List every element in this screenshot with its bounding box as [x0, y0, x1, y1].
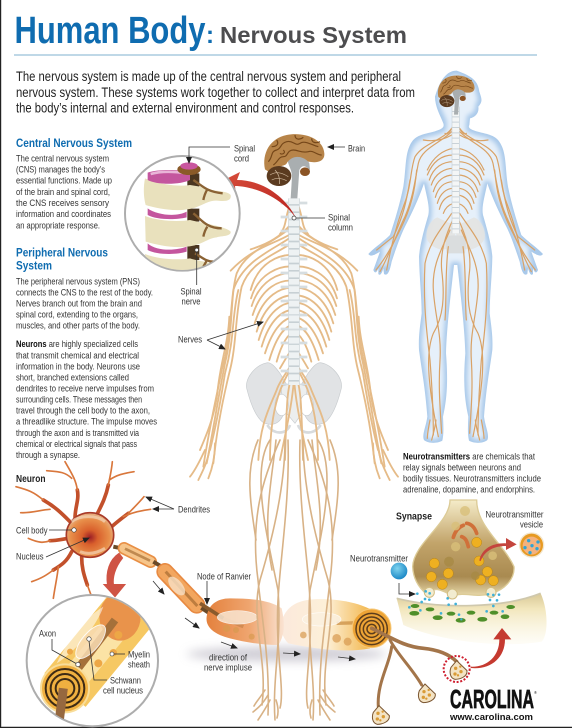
bouton two — [418, 684, 435, 703]
spinal cord top — [177, 166, 201, 175]
small nerves left side — [376, 125, 453, 440]
left trunk and arm nerves — [190, 205, 294, 480]
pelvis — [246, 363, 342, 432]
text block: neurons: that transmit chemical and electrical — [16, 350, 139, 362]
label: axon: Axon — [39, 628, 56, 638]
text block: neurons: a threadlike structure. The impulse moves — [16, 416, 157, 428]
bouton three — [372, 706, 389, 724]
label: brain: Brain — [348, 142, 365, 154]
label: myelin sheath: Myelin — [128, 648, 150, 660]
label: brain — [328, 142, 365, 154]
label: schwann cell nucleus — [87, 637, 143, 696]
label: spinal cord — [189, 142, 255, 164]
label: dendrites — [146, 497, 210, 514]
neurotransmitter ball — [391, 563, 407, 579]
label: myelin sheath — [110, 648, 150, 670]
presynaptic bulb — [413, 500, 514, 596]
small brain — [438, 76, 475, 115]
label: myelin sheath: sheath — [128, 658, 150, 670]
panel: central nervous system text — [16, 136, 132, 232]
text block: neurons: chemical or electrical signals that pass — [16, 439, 137, 450]
body inner glow — [368, 71, 543, 443]
arrows: impulse direction — [153, 581, 355, 659]
synapse illustration — [391, 500, 547, 668]
label: direction of nerve impulse — [204, 652, 252, 672]
panel: peripheral nervous system text: connects the CNS to the rest of the body. — [16, 288, 153, 298]
cell body — [66, 513, 114, 557]
panel: central nervous system text: essential functions. Made up — [16, 176, 112, 186]
label: spinal column: column — [328, 222, 353, 232]
heading: neuron: Neuron — [16, 473, 46, 485]
main nervous system figure — [190, 134, 398, 480]
red arrow to synapse — [471, 628, 511, 668]
logo: carolina: www.carolina.com — [449, 712, 533, 723]
label: spinal nerve: Spinal — [180, 286, 202, 296]
leg nerves right — [300, 440, 338, 720]
vertebrae — [144, 178, 231, 280]
text block: neurons: short, branched extensions called — [16, 372, 129, 384]
discs — [148, 170, 190, 254]
label: schwann cell nucleus: cell nucleus — [103, 684, 143, 696]
receptors — [409, 604, 515, 623]
neurotransmitters text — [403, 452, 541, 496]
label: neurotransmitter: Neurotransmitter — [350, 552, 408, 564]
intro text: nervous system. These systems work together to collect and interpret data from — [16, 85, 415, 100]
text block: neurons: through a synapse. — [16, 450, 80, 461]
neurotransmitter molecules — [408, 590, 504, 620]
title: Nervous System — [220, 22, 407, 48]
brain — [264, 134, 324, 198]
inset: myelin detail circle — [27, 554, 158, 726]
panel: central nervous system text: the CNS receives sensory — [16, 198, 109, 209]
axon segment two — [165, 572, 197, 605]
title: Human Body — [14, 10, 206, 52]
vesicles — [426, 537, 498, 589]
panel: peripheral nervous system text — [16, 246, 153, 332]
label: neurotransmitter vesicle: Neurotransmitter — [486, 508, 544, 520]
small body figure — [368, 71, 543, 443]
label: neurotransmitter — [350, 552, 415, 594]
label: nucleus — [16, 538, 89, 562]
small pelvis — [426, 217, 485, 253]
panel: central nervous system text: (CNS) manages the body’s — [16, 164, 105, 176]
label: spinal column: Spinal — [328, 212, 350, 222]
small spine — [444, 107, 468, 233]
arrow to vesicle detail — [479, 538, 517, 561]
label: spinal column — [292, 212, 353, 232]
panel: central nervous system text: The central nervous system — [16, 154, 109, 164]
axon terminal branches and boutons — [372, 628, 470, 724]
text block: neurons: dendrites to receive nerve impulses from — [16, 384, 154, 394]
panel: peripheral nervous system text: System — [16, 258, 52, 272]
text block: neurons: Neurons are highly specialized cells — [16, 339, 138, 350]
vesicle detail — [520, 533, 544, 557]
label: schwann cell nucleus: Schwann — [110, 674, 141, 686]
panel: central nervous system text: Central Nervous System — [16, 136, 132, 150]
axon large myelin segment — [187, 598, 391, 661]
intro text: the body’s internal and external environment and control responses. — [16, 100, 354, 116]
mitochondria — [453, 523, 477, 547]
panel: peripheral nervous system text: spinal cord, extending to the organs, — [16, 310, 138, 320]
label: nucleus: Nucleus — [16, 550, 44, 562]
body silhouette — [368, 71, 543, 443]
title — [14, 10, 407, 52]
neurotransmitters text: adrenaline, dopamine, and endorphins. — [403, 484, 535, 496]
bouton — [450, 661, 467, 679]
label: neurotransmitter vesicle — [486, 508, 544, 530]
text block: neurons — [16, 339, 157, 461]
text block: neurons: through the axon and is transmitted via — [16, 428, 139, 439]
spine — [277, 198, 311, 385]
title: : — [206, 22, 214, 49]
label: nerves — [178, 322, 263, 349]
text block: neurons: information in the body. Neurons use — [16, 362, 140, 372]
logo: carolina — [449, 684, 537, 723]
label: nerves: Nerves — [178, 334, 202, 344]
neurotransmitters text: relay signals between neurons and — [403, 462, 521, 474]
spinal nerves — [193, 180, 223, 267]
label: spinal cord: Spinal — [234, 142, 255, 154]
inset: vertebrae circle — [125, 156, 240, 280]
intro text: The nervous system is made up of the central nervous system and peripheral — [16, 69, 401, 84]
red arrow from neuron to inset — [105, 554, 124, 596]
label: spinal nerve: nerve — [182, 296, 200, 306]
dotted selection ring — [444, 656, 470, 682]
panel: peripheral nervous system text: The peripheral nervous system (PNS) — [16, 276, 140, 288]
text block: neurons: surrounding cells. These messages then — [16, 394, 142, 406]
panel: central nervous system text: information and coordinates — [16, 209, 111, 220]
leg nerves — [250, 440, 338, 720]
axon segment one — [113, 547, 122, 548]
small nerves right side — [458, 125, 535, 440]
logo: carolina: ® — [534, 690, 537, 695]
neuron illustration — [16, 462, 213, 615]
label: cell body: Cell body — [16, 524, 48, 536]
heading: synapse: Synapse — [396, 510, 432, 522]
label: direction of nerve impulse: nerve impluse — [204, 662, 252, 672]
panel: peripheral nervous system text: Nerves branch out from the brain and — [16, 298, 142, 310]
label: cell body — [16, 524, 76, 536]
leg nerves left — [250, 440, 288, 720]
rolled myelin end — [352, 609, 391, 648]
right trunk and arm nerves — [294, 205, 398, 480]
label: spinal nerve — [180, 248, 202, 306]
released vesicle bumps — [424, 587, 496, 599]
neurotransmitters text: bodily tissues. Neurotransmitters include — [403, 474, 541, 484]
label: axon — [39, 628, 80, 667]
panel: central nervous system text: an appropriate response. — [16, 220, 100, 232]
panel: peripheral nervous system text: muscles, and other parts of the body. — [16, 320, 140, 332]
red arrow from spinal column to inset — [218, 172, 296, 218]
label: spinal cord: cord — [234, 152, 249, 164]
spinal canal — [187, 173, 199, 260]
label: node of ranvier: Node of Ranvier — [197, 570, 251, 582]
label: direction of nerve impulse: direction of — [209, 652, 247, 662]
neurotransmitters text: Neurotransmitters are chemicals that — [403, 452, 535, 462]
panel: central nervous system text: of the brain and spinal cord, — [16, 187, 110, 198]
label: neurotransmitter vesicle: vesicle — [520, 518, 543, 530]
label: dendrites: Dendrites — [178, 504, 210, 514]
text block: neurons: travel through the cell body to the axon, — [16, 406, 150, 416]
label: node of ranvier — [197, 570, 251, 604]
panel: peripheral nervous system text: Peripheral Nervous — [16, 246, 108, 260]
intro text — [16, 69, 415, 116]
postsynaptic membrane — [397, 593, 547, 644]
dendrites — [16, 462, 151, 598]
